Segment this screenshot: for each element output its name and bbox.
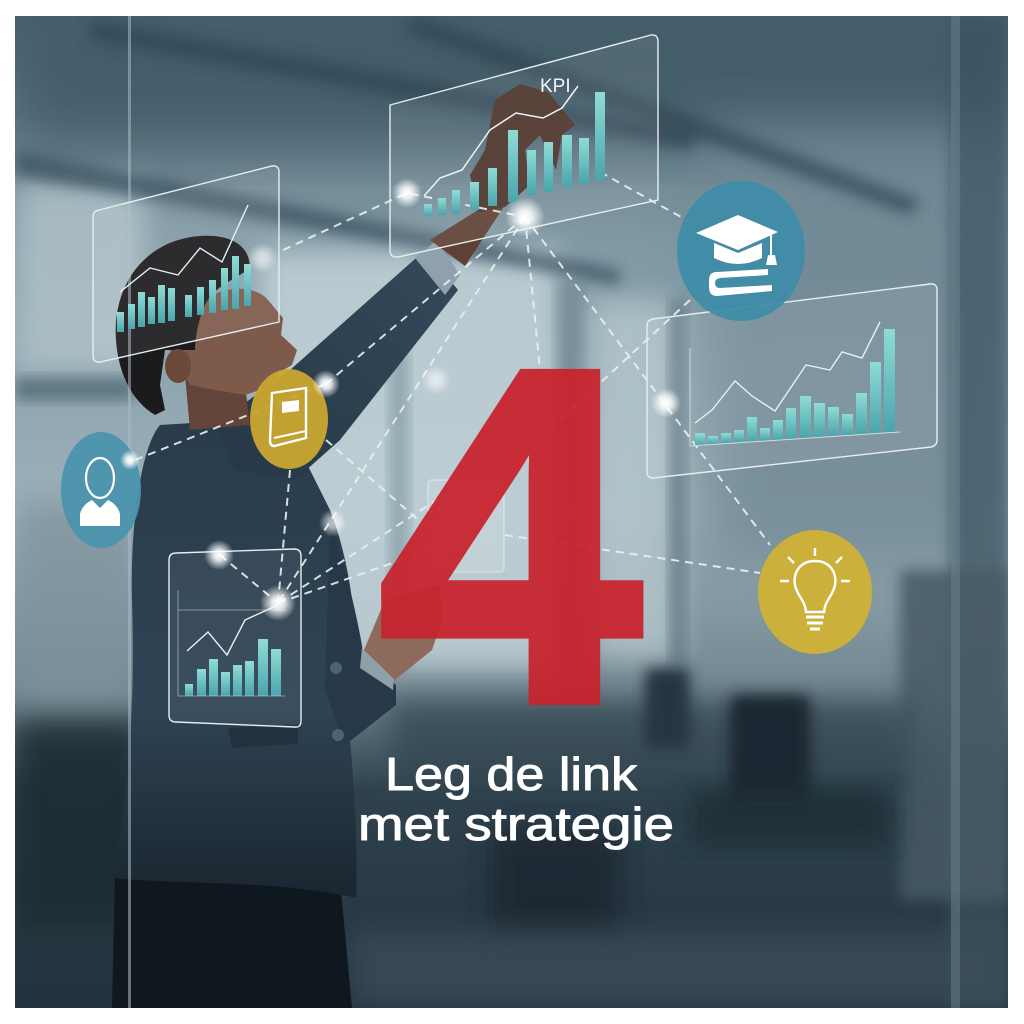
icon: book xyxy=(250,369,328,469)
shirt cuff lower xyxy=(360,648,394,690)
glass edge line xyxy=(128,16,131,1008)
dashed network lines xyxy=(135,172,770,603)
lower sleeve xyxy=(325,552,396,741)
neck xyxy=(185,375,250,430)
number 4: 4 xyxy=(379,272,644,801)
hand lower xyxy=(364,608,436,680)
jacket body xyxy=(112,420,357,898)
icon: person xyxy=(61,432,141,548)
bars xyxy=(185,639,281,696)
jacket buttons xyxy=(330,662,344,741)
axis xyxy=(178,590,285,696)
person xyxy=(112,84,575,1008)
faint hidden chart behind number xyxy=(428,480,504,572)
heading: Leg de link xyxy=(385,748,638,800)
shirt cuff xyxy=(415,240,460,295)
raised sleeve xyxy=(247,258,458,468)
KPI label: KPI xyxy=(540,76,571,97)
trend line xyxy=(120,205,248,292)
panel: chart right xyxy=(647,284,937,478)
icon: graduation cap xyxy=(677,181,805,321)
bars xyxy=(117,256,251,332)
bars xyxy=(695,329,895,446)
icon: light bulb xyxy=(758,530,872,654)
panel: chart lower left xyxy=(169,549,301,727)
raised forearm xyxy=(430,205,505,266)
KPI bars xyxy=(424,92,605,216)
legs xyxy=(112,870,352,1008)
ear xyxy=(165,349,191,383)
hand xyxy=(470,84,575,212)
axis xyxy=(690,348,900,446)
hair xyxy=(116,236,250,415)
glowing nodes xyxy=(120,178,681,621)
jacket lapel and pocket xyxy=(228,724,298,748)
heading xyxy=(358,748,674,850)
trend line xyxy=(695,322,880,423)
face xyxy=(170,289,297,395)
trend line xyxy=(187,605,278,655)
panel: KPI chart top xyxy=(390,35,658,257)
heading: met strategie xyxy=(358,798,674,850)
panel: chart left top xyxy=(93,166,279,362)
KPI trend line xyxy=(424,86,578,196)
